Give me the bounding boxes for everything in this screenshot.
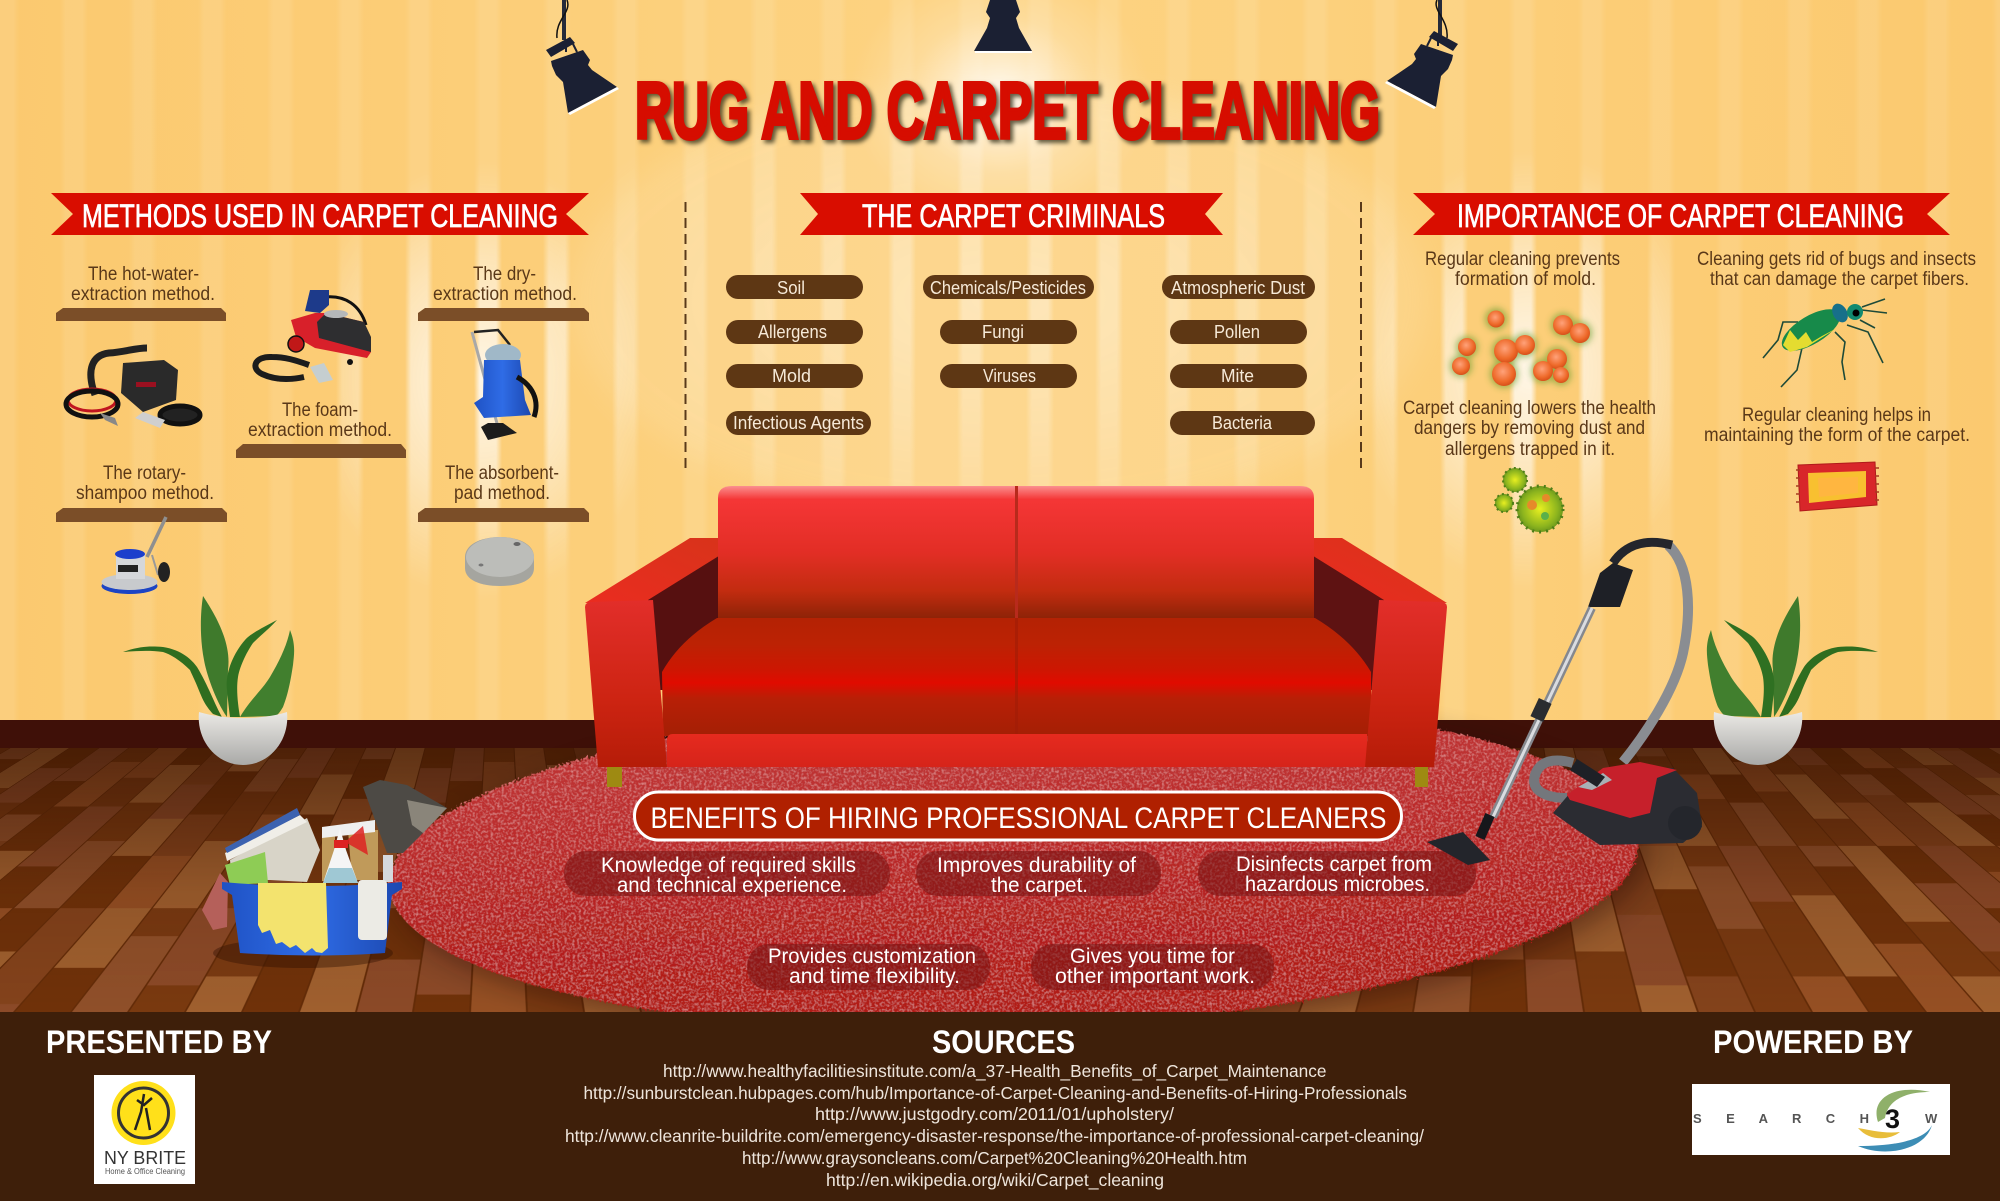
sources: SOURCES [932, 1024, 1075, 1060]
benefit: time: Gives you time for [1070, 945, 1235, 968]
logo: Search3W [1692, 1084, 1950, 1155]
pill: Bacteria: Bacteria [1212, 412, 1273, 433]
benefit: disinfects [1198, 851, 1476, 896]
benefit: time [1031, 944, 1274, 990]
sources: http://www.graysoncleans.com/Carpet%20Cleaning%20Health.htm [742, 1148, 1247, 1168]
footer band [0, 1012, 2000, 1201]
benefit: knowledge [564, 851, 890, 897]
pill: Atmospheric Dust: Atmospheric Dust [1171, 277, 1305, 298]
benefit: knowledge: Knowledge of required skills [601, 854, 856, 877]
text: health dangers: Carpet cleaning lowers the health [1403, 398, 1656, 419]
sources: http://sunburstclean.hubpages.com/hub/Importance-of-Carpet-Cleaning-and-Benefits-of-Hiring-Professionals [584, 1083, 1407, 1103]
method: foam extraction: extraction method. [248, 420, 392, 441]
sources: http://en.wikipedia.org/wiki/Carpet_cleaning [826, 1170, 1164, 1191]
plant: left [123, 596, 294, 765]
text: prevents mold: formation of mold. [1455, 269, 1596, 290]
method: rotary shampoo [56, 463, 227, 594]
method: hot-water extraction: The hot-water- [88, 264, 199, 285]
pill: Mold [726, 364, 863, 388]
benefit: durability: Improves durability of [937, 854, 1136, 877]
powered by [1692, 1024, 1950, 1155]
pill: Infectious Agents: Infectious Agents [733, 412, 864, 433]
method: dry extraction [418, 264, 589, 440]
logo: NY Brite: NY BRITE [104, 1148, 186, 1168]
baseboard [0, 720, 2000, 748]
pill: Fungi: Fungi [982, 321, 1024, 342]
panel: methods [51, 193, 589, 594]
text: prevents mold: Regular cleaning prevents [1425, 249, 1620, 270]
cleaning bucket [202, 780, 447, 968]
sources [565, 1024, 1424, 1191]
heading: criminals banner: THE CARPET CRIMINALS [862, 198, 1165, 234]
method: absorbent pad: The absorbent- [445, 463, 559, 484]
pill: Viruses [940, 364, 1077, 388]
divider: left [684, 202, 686, 473]
presented by [46, 1024, 272, 1184]
rug shadow [392, 685, 1652, 1059]
method: absorbent pad [418, 463, 589, 586]
pill: Viruses: Viruses [983, 365, 1036, 386]
round red rug [384, 677, 1644, 1051]
presented by: PRESENTED BY [46, 1024, 272, 1060]
plant: right [1707, 596, 1878, 765]
logo: Search3W: 3 [1885, 1104, 1900, 1134]
floor shading [0, 748, 2000, 1012]
benefit: customization: Provides customization [768, 945, 976, 968]
sources: http://www.healthyfacilitiesinstitute.com/a_37-Health_Benefits_of_Carpet_Maintenance [663, 1061, 1326, 1082]
benefit: durability: the carpet. [991, 874, 1088, 897]
powered by: POWERED BY [1713, 1024, 1913, 1060]
vacuum cleaner [1427, 542, 1702, 865]
text: bugs and insects: Cleaning gets rid of bugs and insects [1697, 249, 1976, 270]
text: health dangers: dangers by removing dust and [1414, 418, 1645, 439]
spotlight: left [546, 0, 619, 115]
text: health dangers [1403, 398, 1656, 460]
icon: viruses [1495, 468, 1563, 532]
red sofa [585, 486, 1447, 787]
divider: right [1360, 202, 1362, 473]
icon: mini carpet [1796, 462, 1879, 511]
logo: NY Brite: Home & Office Cleaning [105, 1167, 185, 1176]
method: dry extraction: extraction method. [433, 284, 577, 305]
icon: beetle [1763, 299, 1887, 387]
benefit: time: other important work. [1055, 965, 1255, 988]
pill: Pollen [1170, 320, 1307, 344]
wood floor [0, 748, 2000, 1012]
spotlight: right [1385, 0, 1458, 109]
pill: Soil: Soil [777, 277, 805, 298]
text: form of carpet: Regular cleaning helps in [1742, 405, 1931, 426]
method: hot-water extraction [56, 264, 226, 428]
heading: methods banner [51, 193, 589, 235]
method: rotary shampoo: The rotary- [103, 463, 186, 484]
pill: Fungi [940, 320, 1077, 344]
pill: Allergens: Allergens [758, 321, 827, 342]
method: hot-water extraction: extraction method. [71, 284, 215, 305]
pill: Mite: Mite [1221, 365, 1254, 386]
panel: benefits [564, 792, 1476, 990]
method: dry extraction: The dry- [473, 264, 536, 285]
panel: importance [1403, 193, 1976, 532]
method: rotary shampoo: shampoo method. [76, 483, 214, 504]
heading: benefits pill [634, 792, 1402, 840]
title: RUG AND CARPET CLEANING [635, 66, 1380, 155]
heading: methods banner: METHODS USED IN CARPET CLEANING [82, 198, 558, 234]
logo: Search3W: S E A R C H [1693, 1111, 1869, 1126]
benefit: customization [747, 944, 990, 990]
method: foam extraction [236, 290, 406, 458]
sources: http://www.cleanrite-buildrite.com/emergency-disaster-response/the-importance-of-professional-carpet-cleaning/ [565, 1126, 1424, 1146]
logo: Search3W: W [1925, 1111, 1938, 1126]
pill: Mite [1170, 364, 1307, 388]
benefit: customization: and time flexibility. [789, 965, 960, 988]
pill: Allergens [726, 320, 863, 344]
benefit: disinfects: hazardous microbes. [1245, 873, 1430, 896]
panel: carpet criminals [726, 193, 1315, 435]
text: prevents mold [1425, 249, 1620, 290]
spotlight: centre [974, 0, 1032, 53]
pill: Pollen: Pollen [1214, 321, 1260, 342]
text: form of carpet [1704, 405, 1970, 446]
logo: NY Brite [94, 1075, 195, 1184]
method: absorbent pad: pad method. [454, 483, 550, 504]
text: health dangers: allergens trapped in it. [1445, 439, 1615, 460]
icon: mold spores [1450, 308, 1592, 388]
text: form of carpet: maintaining the form of the carpet. [1704, 425, 1970, 446]
pill: Bacteria [1170, 411, 1315, 435]
sources: http://www.justgodry.com/2011/01/upholstery/ [815, 1104, 1174, 1124]
wall with stripes and lamp glow [0, 0, 2000, 720]
heading: benefits pill: BENEFITS OF HIRING PROFESSIONAL CARPET CLEANERS [650, 802, 1386, 835]
pill: Soil [726, 275, 863, 299]
text: bugs and insects: that can damage the carpet fibers. [1710, 269, 1969, 290]
benefit: knowledge: and technical experience. [617, 874, 847, 897]
benefit: durability [916, 851, 1161, 897]
pill: Mold: Mold [772, 365, 811, 386]
heading: criminals banner [800, 193, 1223, 235]
method: foam extraction: The foam- [282, 400, 358, 421]
pill: Chemicals/Pesticides: Chemicals/Pesticides [930, 277, 1086, 298]
text: bugs and insects [1697, 249, 1976, 290]
benefit: disinfects: Disinfects carpet from [1236, 853, 1432, 876]
